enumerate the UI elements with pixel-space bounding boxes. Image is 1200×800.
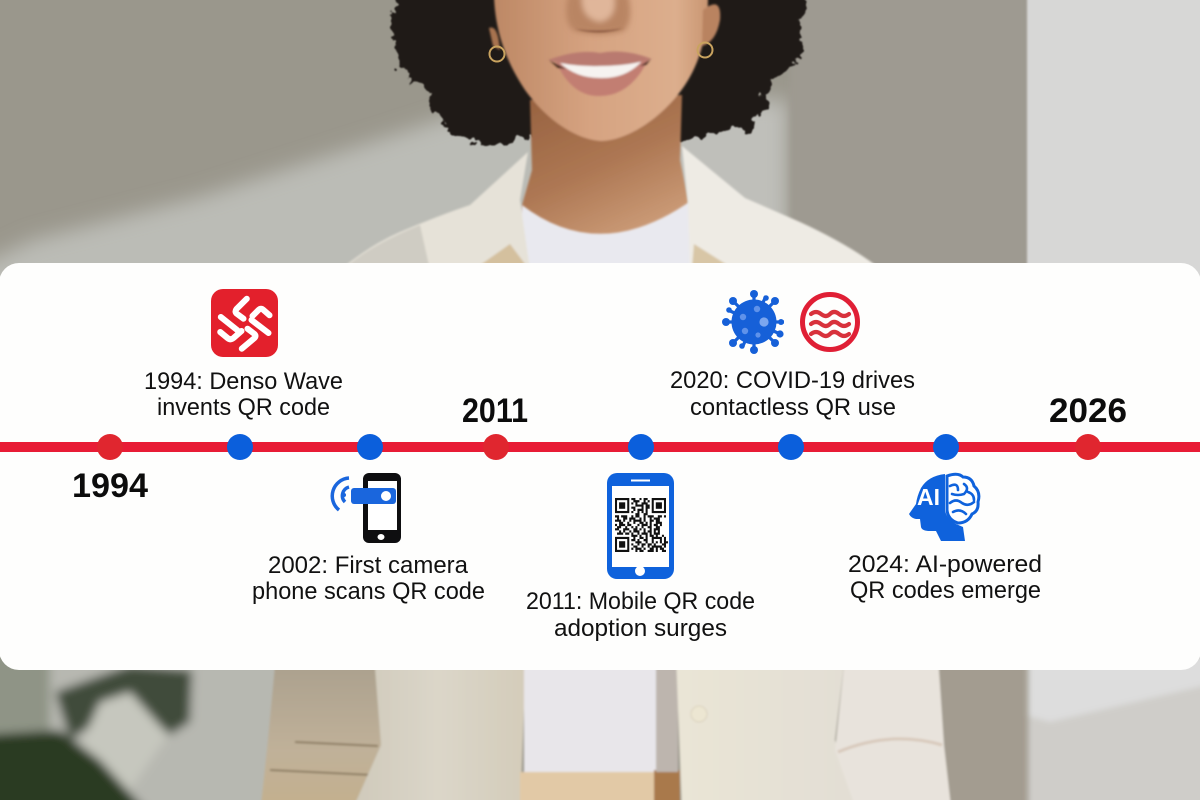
button [691, 706, 707, 722]
hair [390, 0, 806, 146]
upper lip [548, 51, 652, 66]
icon: mobile phone with QR code [607, 473, 674, 579]
inner tan lining [476, 244, 528, 268]
event text: 1994: invents QR code [157, 394, 330, 421]
trousers [520, 772, 660, 800]
plant [0, 655, 300, 800]
face [494, 0, 708, 141]
right shoulder and collar [682, 146, 882, 270]
icon: contactless waves ring [802, 294, 858, 350]
event text: 2024 [848, 551, 1042, 604]
event text: 2002: 2002: First camera [268, 552, 468, 579]
ear [702, 4, 720, 46]
event text: 1994: 1994: Denso Wave [144, 368, 343, 395]
teeth [560, 61, 642, 78]
right jacket panel [676, 655, 858, 800]
earrings [490, 42, 712, 62]
event text: 2024: 2024: AI-powered [848, 551, 1042, 578]
event text: 2002: phone scans QR code [252, 578, 485, 605]
year label 1994: 1994 [72, 467, 148, 505]
event text: 2002 [252, 552, 485, 605]
left shoulder and collar [340, 152, 530, 270]
event text: 2020 [670, 367, 915, 421]
left sleeve [260, 655, 381, 800]
right sleeve [835, 655, 952, 800]
right wall [938, 655, 1028, 800]
t-shirt top [520, 200, 700, 275]
icon: camera phone scanning [332, 473, 401, 543]
icon: virus [722, 290, 784, 354]
year label 2011: 2011 [462, 392, 528, 430]
event text: 2024: QR codes emerge [850, 577, 1041, 604]
icon: AI head with brain: AI [917, 484, 940, 510]
icon: Denso Wave logo [211, 289, 278, 357]
event text: 2011 [526, 588, 755, 642]
year label 2026: 2026 [1049, 392, 1127, 430]
t-shirt lower [524, 655, 664, 775]
icon: AI head with brain [909, 474, 979, 541]
right wall lower [1028, 655, 1200, 800]
lower body [260, 655, 1028, 800]
nose [566, 0, 630, 34]
timeline dots [97, 434, 1101, 460]
event text: 1994 [144, 368, 343, 421]
event text: 2020: 2020: COVID-19 drives [670, 367, 915, 394]
timeline line [0, 442, 1200, 452]
left jacket panel [350, 655, 526, 800]
white timeline panel [0, 263, 1200, 670]
lower lip [556, 60, 648, 96]
event text: 2020: contactless QR use [690, 394, 896, 421]
event text: 2011: 2011: Mobile QR code [526, 588, 755, 615]
neck [522, 95, 690, 250]
event text: 2011: adoption surges [554, 615, 727, 642]
